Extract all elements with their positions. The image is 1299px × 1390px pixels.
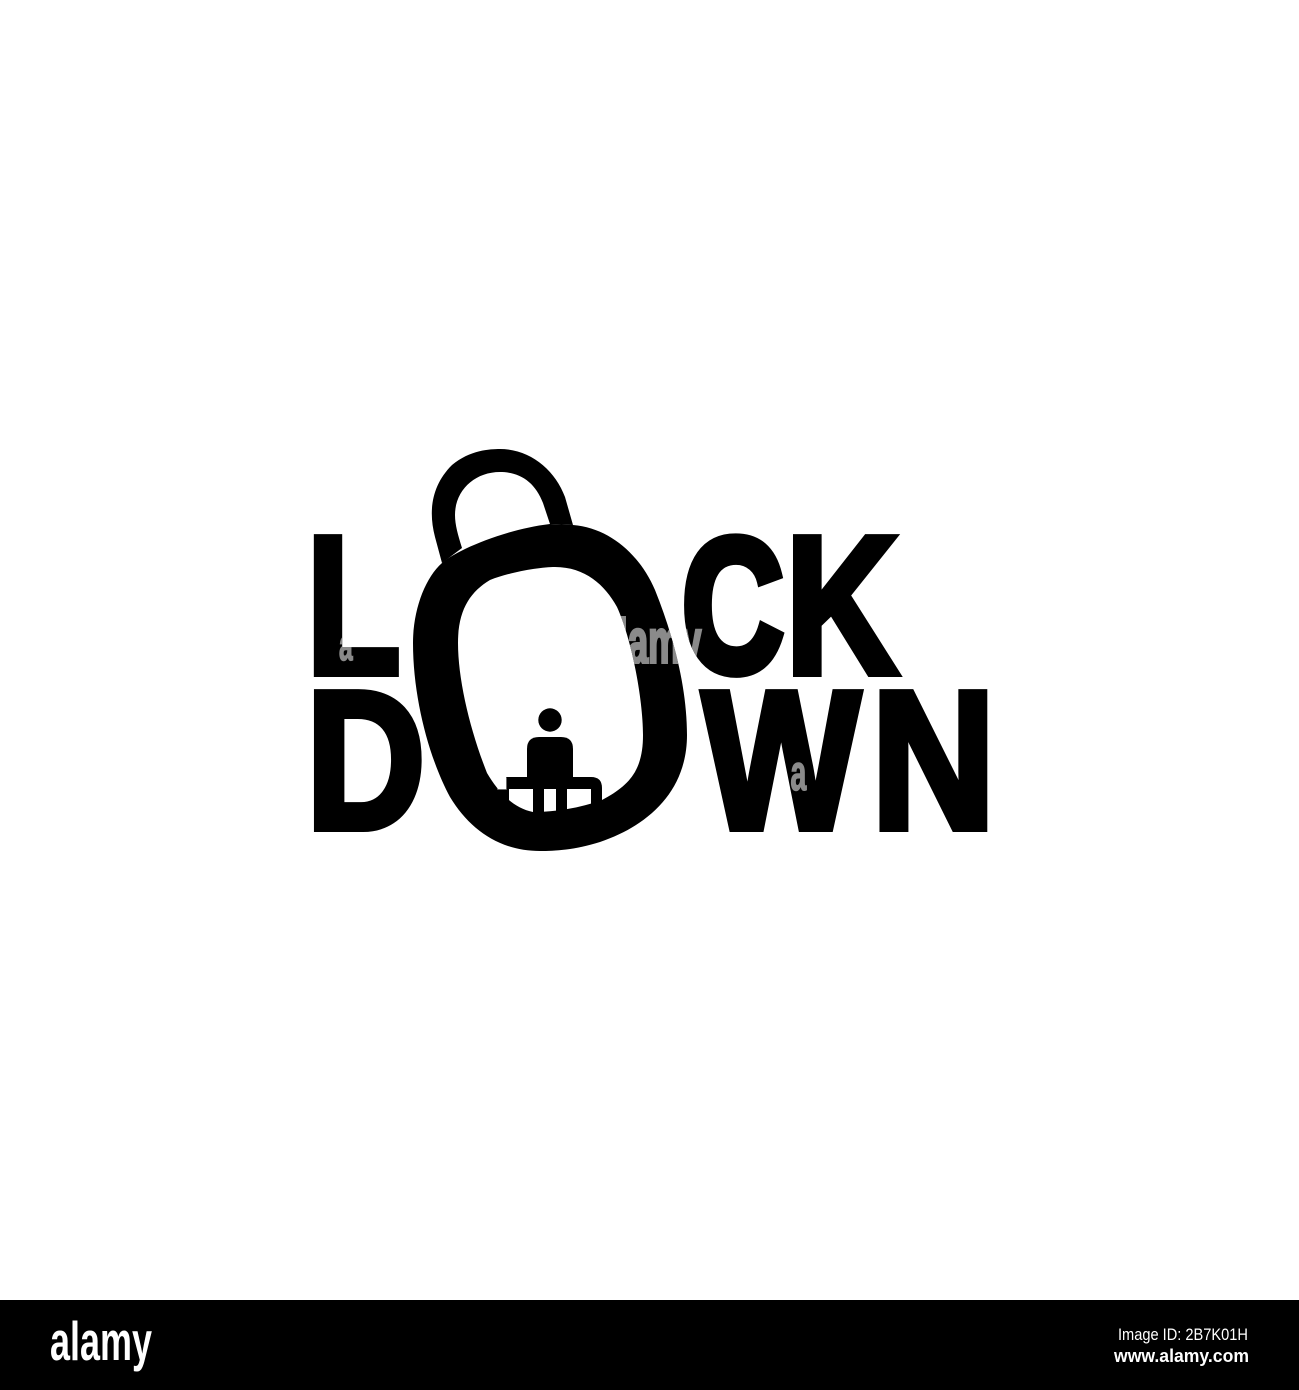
word LOCK letters [307,497,898,715]
logo wordmark [306,497,995,871]
padlock body letter O [413,524,687,851]
icon: person sitting on bench [498,708,602,814]
watermark fragments: a [339,621,354,670]
padlock shackle [432,449,573,563]
footer bar [0,1300,1299,1390]
word DOWN letters: N [872,651,995,871]
word DOWN letters: D [306,651,425,870]
watermark fragments [339,608,807,801]
padlock O with shackle [413,449,687,851]
word LOCK letters: C [682,500,784,712]
watermark fragments: a [790,745,807,801]
word LOCK letters: L [307,497,400,715]
word DOWN letters: W [703,650,860,870]
word LOCK letters: K [786,497,898,715]
watermark fragments: lamy [618,608,701,679]
word DOWN letters [306,650,995,871]
footer brand alamy: alamy [50,1310,152,1372]
website: www.alamy.com [1113,1346,1249,1366]
image id: Image ID: 2B7K01H [1118,1325,1248,1344]
